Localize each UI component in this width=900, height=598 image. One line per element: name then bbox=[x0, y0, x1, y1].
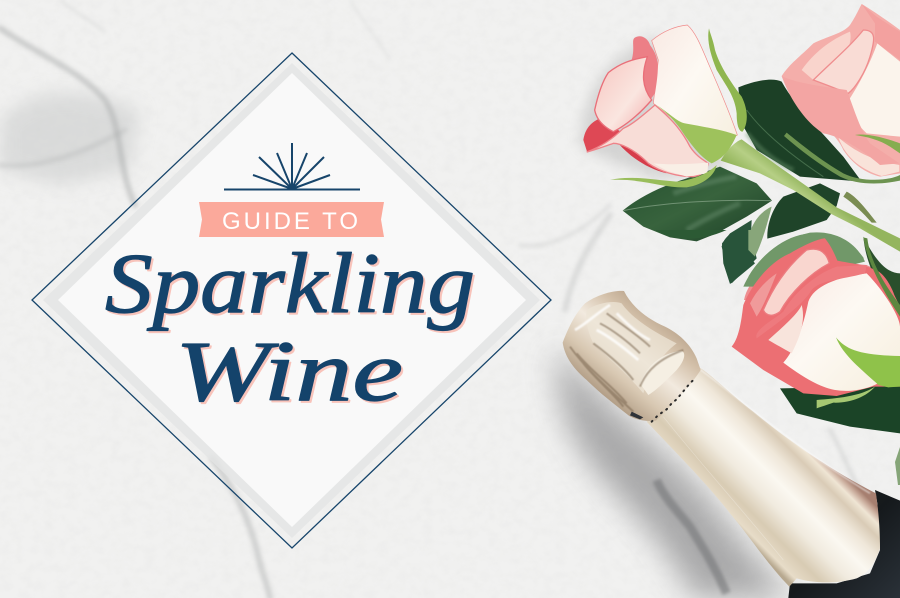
leaf: upper dark leaf bbox=[738, 80, 862, 182]
stem: second rose stem bbox=[784, 133, 900, 184]
marble vein under bottle bbox=[657, 480, 727, 593]
title diamond badge bbox=[32, 53, 551, 548]
heading: Sparkling: Sparkling bbox=[107, 237, 477, 333]
leaf: behind lower rose bbox=[655, 230, 900, 433]
leaf: edge fragment bbox=[895, 447, 900, 485]
icon: sparkle burst bbox=[224, 143, 360, 190]
bottle shadow bbox=[556, 347, 793, 598]
rose shadow bbox=[580, 37, 727, 180]
rose: lower bloom bbox=[732, 238, 900, 396]
diamond: white panel bbox=[58, 73, 526, 527]
rose: left bud bbox=[583, 25, 737, 177]
heading: Sparkling: Sparkling bbox=[105, 235, 475, 331]
diamond: navy outline bbox=[32, 53, 551, 548]
banner: guide to: GUIDE TO bbox=[222, 208, 358, 235]
rose: lower bloom top, behind foliage bbox=[744, 238, 895, 300]
roses and leaves bbox=[580, 4, 900, 300]
rose: lower bloom sepals bbox=[817, 237, 900, 408]
rose: upper right bloom bbox=[782, 4, 900, 177]
bottle: gold neck collar bbox=[647, 367, 880, 587]
bottle: dark glass bbox=[788, 490, 900, 598]
stem: main rose stem bbox=[721, 139, 900, 252]
lower rose bbox=[556, 230, 900, 598]
diamond: grey band bbox=[43, 63, 540, 538]
rose: left bud sepals bbox=[610, 28, 747, 187]
stem: branch bbox=[843, 192, 877, 223]
banner: guide to bbox=[199, 202, 384, 237]
leaf: small side leaves bbox=[722, 183, 864, 284]
heading: Wine: Wine bbox=[177, 325, 405, 421]
heading: Wine: Wine bbox=[175, 323, 403, 419]
bottle: foil capsule top bbox=[563, 291, 701, 422]
leaf: big lower leaf bbox=[623, 167, 772, 241]
